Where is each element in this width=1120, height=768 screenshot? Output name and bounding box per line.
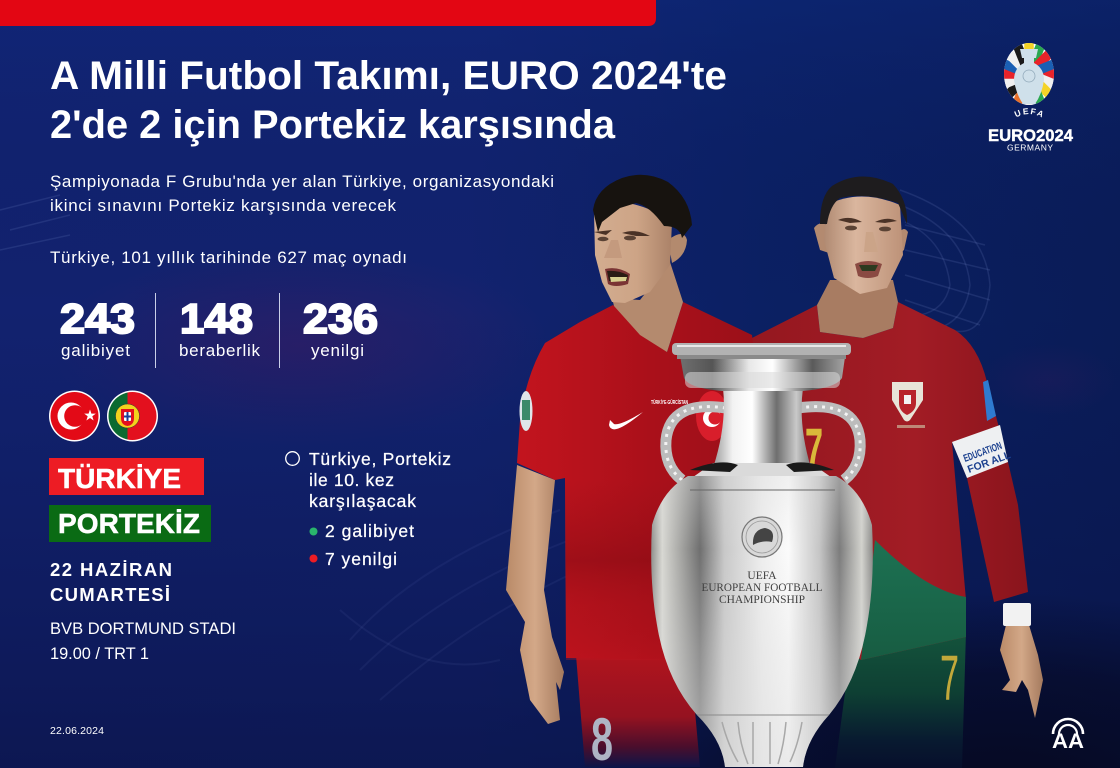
head-to-head note: Türkiye, Portekiz — [309, 449, 451, 469]
neck — [817, 280, 898, 338]
player: left, Türkiye midfielder — [506, 175, 760, 768]
trophy — [651, 343, 873, 767]
shorts — [576, 655, 700, 767]
sleeve patch — [520, 391, 532, 431]
head-to-head note: ile 10. kez — [309, 470, 394, 490]
top red bar — [0, 0, 656, 26]
history line: Türkiye, 101 yıllık tarihinde 627 maç oynadı — [50, 248, 407, 267]
label: Türkiye: TÜRKİYE — [58, 463, 181, 494]
engraving — [702, 570, 822, 606]
neck — [612, 262, 683, 352]
bowl under rim — [679, 350, 846, 391]
hair — [820, 176, 907, 224]
head — [594, 203, 672, 303]
jersey — [745, 302, 1028, 660]
stat: wins: 243 — [60, 295, 135, 342]
intro text — [50, 172, 554, 215]
logo: UEFA Euro 2024: UEFA — [1014, 108, 1042, 118]
forearm and hand — [1000, 625, 1043, 718]
UEFA emblem — [742, 517, 782, 557]
logo: Anadolu Agency: AA — [1052, 730, 1084, 753]
logo: UEFA Euro 2024: GERMANY — [1007, 142, 1053, 152]
intro text: ikinci sınavını Portekiz karşısında verecek — [50, 196, 396, 215]
engraving: EUROPEAN FOOTBALL — [702, 582, 822, 594]
stem — [713, 388, 811, 468]
arm and hand — [506, 465, 564, 724]
title: A Milli Futbol Takımı, EURO 2024'te — [50, 54, 727, 98]
player: right, Portugal forward: EDUCATION — [962, 440, 1004, 465]
foot ribs — [722, 722, 802, 764]
crest — [892, 382, 925, 428]
ear — [668, 234, 687, 263]
player: right, Portugal forward: 7 — [940, 642, 959, 714]
wristband — [1003, 603, 1031, 626]
hair — [593, 175, 692, 238]
date stamp: 22.06.2024 — [50, 725, 104, 737]
stat: draws — [179, 295, 260, 360]
match venue and broadcast — [50, 619, 236, 663]
stat: draws: beraberlik — [179, 341, 260, 360]
collar — [686, 463, 838, 482]
stat: losses: 236 — [303, 295, 378, 342]
title — [50, 54, 727, 147]
facial features — [838, 218, 897, 223]
match venue and broadcast: 19.00 / TRT 1 — [50, 644, 149, 663]
stat: losses: yenilgi — [311, 341, 364, 360]
label: Türkiye — [49, 458, 204, 495]
label: Portekiz: PORTEKİZ — [58, 508, 200, 539]
engraving: CHAMPIONSHIP — [719, 594, 805, 606]
player: right, Portugal forward: FOR ALL — [966, 449, 1013, 476]
head — [824, 196, 903, 294]
stat: wins — [60, 295, 135, 360]
stats: overall record — [60, 293, 378, 368]
ears — [814, 223, 832, 254]
crest — [696, 391, 728, 441]
intro text: Şampiyonada F Grubu'nda yer alan Türkiye, organizasyondaki — [50, 172, 554, 191]
stat: wins: galibiyet — [61, 341, 130, 360]
match date — [50, 559, 172, 605]
head-to-head note: karşılaşacak — [309, 491, 416, 511]
captain armband — [952, 425, 1008, 478]
losses bullet: 7 yenilgi — [325, 549, 397, 569]
wins bullet: 2 galibiyet — [325, 521, 414, 541]
shirt number: 7 — [805, 416, 823, 483]
stat: losses — [303, 295, 378, 360]
logo: UEFA Euro 2024 — [988, 43, 1074, 152]
swoosh — [609, 412, 643, 429]
handles — [666, 407, 860, 480]
player: right, Portugal forward — [745, 176, 1043, 768]
facial features — [594, 230, 650, 236]
kit lettering: TÜRKİYE-GÜRCİSTAN — [651, 399, 688, 406]
jersey — [517, 302, 760, 660]
title: 2'de 2 için Portekiz karşısında — [50, 103, 616, 147]
match date: CUMARTESİ — [50, 584, 170, 605]
match venue and broadcast: BVB DORTMUND STADI — [50, 619, 236, 638]
icon: Portuguese flag — [107, 390, 158, 442]
head-to-head note — [286, 449, 451, 569]
cup body — [651, 476, 873, 767]
sleeve patch — [983, 380, 996, 421]
logo: Anadolu Agency — [1052, 719, 1084, 753]
icon: Turkish flag — [49, 390, 100, 442]
rim — [672, 343, 851, 355]
shorts — [835, 632, 966, 768]
logo: UEFA Euro 2024: EURO2024 — [988, 126, 1074, 145]
match date: 22 HAZİRAN — [50, 559, 172, 580]
engraving: UEFA — [747, 570, 777, 582]
stat: draws: 148 — [180, 295, 253, 342]
